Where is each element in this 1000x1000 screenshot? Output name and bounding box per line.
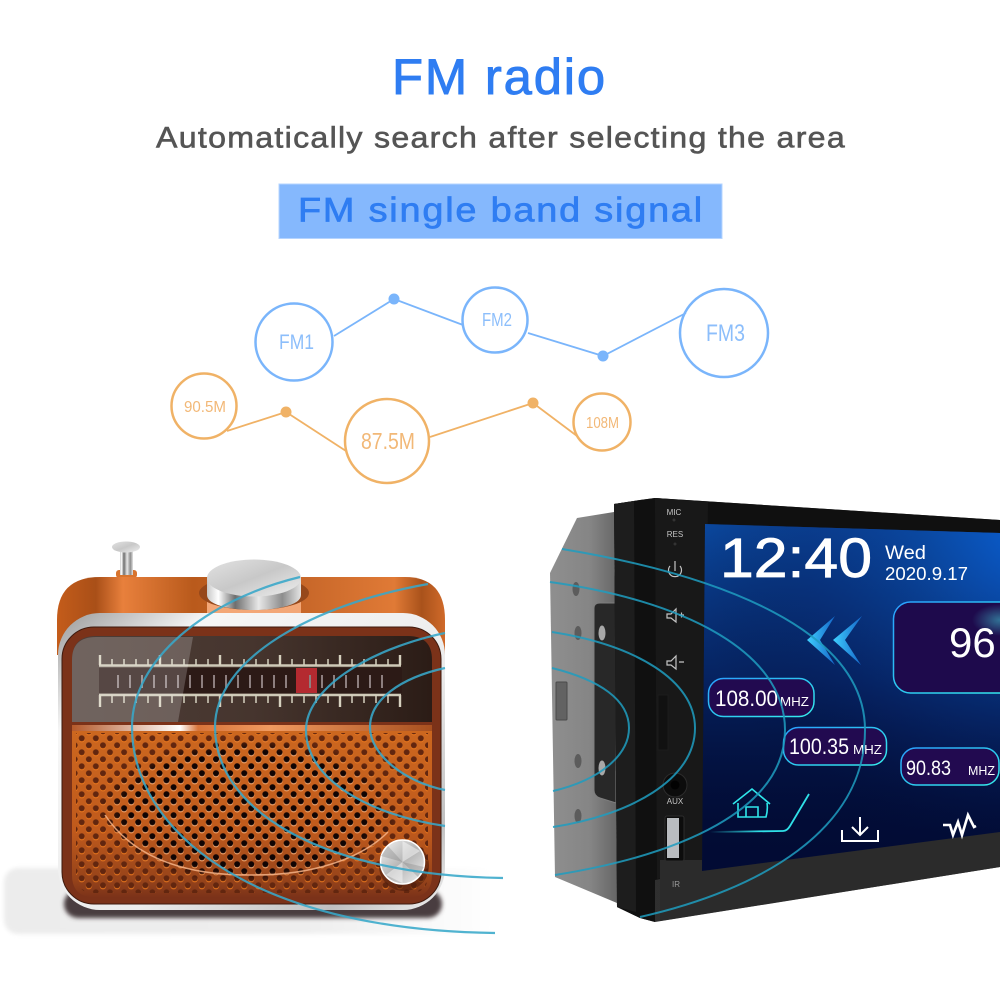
radio volume knob (379, 840, 429, 891)
stereo side controls: MIC (667, 508, 682, 517)
radio top dial (199, 560, 309, 615)
stereo front bezel (614, 498, 1000, 922)
preset 90.83 MHZ: MHZ (968, 763, 995, 778)
radio waves over stereo (550, 549, 865, 917)
current frequency panel: 96 (949, 619, 996, 666)
date (885, 543, 968, 584)
clock: 12:40 (720, 526, 872, 589)
banner: FM single band signal (279, 184, 722, 238)
preset 100.35 MHZ: MHZ (853, 742, 882, 757)
preset 108.00 MHZ (708, 678, 814, 716)
radio front panel (62, 627, 441, 904)
icon: power (668, 561, 682, 577)
stereo side controls: IR (672, 880, 680, 889)
radio illustration (57, 542, 445, 910)
stereo side controls: AUX (667, 797, 684, 806)
icon: seek chevrons (807, 616, 862, 665)
diagram: frequency values: 87.5M (361, 428, 415, 454)
active tab underline (710, 794, 809, 832)
banner: FM single band signal: FM single band signal (298, 192, 704, 230)
radio silver frame (58, 613, 445, 910)
car stereo head unit (550, 498, 1000, 922)
preset 108.00 MHZ: 108.00 (715, 686, 778, 711)
current frequency panel (894, 602, 1000, 693)
diagram: frequency values: 108M (586, 415, 619, 432)
diagram: frequency values: 90.5M (184, 399, 226, 416)
preset 90.83 MHZ (901, 748, 999, 785)
date: Wed (885, 543, 926, 564)
icon: volume up (667, 609, 684, 622)
ground shadow (4, 868, 498, 934)
diagram: FM bands (256, 288, 768, 380)
stereo side plate (550, 512, 617, 903)
radio speaker grille (72, 725, 432, 897)
preset 100.35 MHZ (784, 728, 886, 765)
stereo screen (702, 524, 1000, 871)
diagram: frequency values (172, 374, 630, 483)
icon: volume down (667, 656, 684, 669)
preset 108.00 MHZ: MHZ (780, 694, 809, 709)
diagram: FM bands: FM2 (482, 310, 512, 330)
radio waves over radio (132, 577, 503, 933)
icon: home (733, 789, 770, 817)
preset 90.83 MHZ: 90.83 (906, 757, 951, 780)
subtitle: Automatically search after selecting the area (156, 122, 846, 154)
diagram: FM bands: FM3 (706, 320, 745, 347)
icon: waveform (943, 815, 976, 835)
radio body top (57, 577, 445, 655)
date: 2020.9.17 (885, 564, 968, 584)
stereo side controls (658, 508, 687, 889)
title: FM radio (392, 49, 607, 105)
diagram: FM bands: FM1 (279, 331, 314, 354)
radio tuning display (72, 636, 432, 722)
radio antenna (112, 542, 140, 578)
preset 100.35 MHZ: 100.35 (789, 734, 849, 759)
stereo side controls: RES (667, 530, 683, 539)
icon: download (842, 817, 878, 841)
